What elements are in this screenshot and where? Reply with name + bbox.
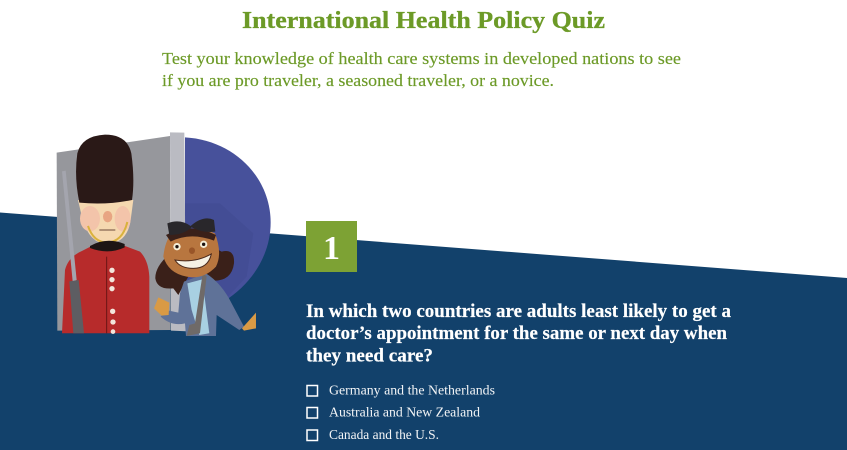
illustration: guard and traveler	[57, 132, 271, 336]
jacket	[161, 273, 244, 336]
grey wall	[57, 136, 171, 331]
hands	[154, 297, 169, 316]
question number badge: 1	[323, 230, 340, 267]
eyes	[173, 243, 181, 250]
answer options	[307, 382, 495, 442]
guard collar	[90, 241, 125, 251]
question text	[306, 301, 731, 366]
option: Australia and New Zealand: Australia and New Zealand	[329, 404, 480, 420]
sunglasses	[167, 218, 215, 235]
intro text: if you are pro traveler, a seasoned traveler, or a novice.	[162, 71, 554, 90]
traveler girl	[154, 218, 256, 336]
guard	[62, 135, 149, 334]
light wall stripe	[170, 132, 186, 331]
navy diagonal background panel	[0, 212, 847, 450]
guard neck and face	[78, 200, 133, 244]
option: Canada and the U.S.: Canada and the U.S.	[329, 427, 439, 442]
intro text: Test your knowledge of health care systems in developed nations to see	[162, 49, 681, 68]
question text: they need care?	[306, 346, 433, 366]
question text: doctor’s appointment for the same or next day when	[306, 323, 727, 344]
question text: In which two countries are adults least likely to get a	[306, 301, 731, 322]
blue circle backdrop	[185, 137, 271, 320]
title: International Health Policy Quiz	[242, 7, 605, 34]
question number badge	[306, 221, 357, 272]
hair	[155, 253, 188, 295]
guard tunic	[62, 246, 149, 333]
bag strap	[187, 274, 207, 336]
option: Germany and the Netherlands: Germany and the Netherlands	[329, 382, 495, 398]
bearskin hat	[76, 135, 133, 204]
intro text	[162, 49, 681, 90]
face	[163, 229, 219, 277]
rifle	[62, 171, 77, 281]
tunic buttons	[109, 268, 116, 334]
shirt	[187, 279, 209, 335]
smile	[175, 254, 211, 268]
